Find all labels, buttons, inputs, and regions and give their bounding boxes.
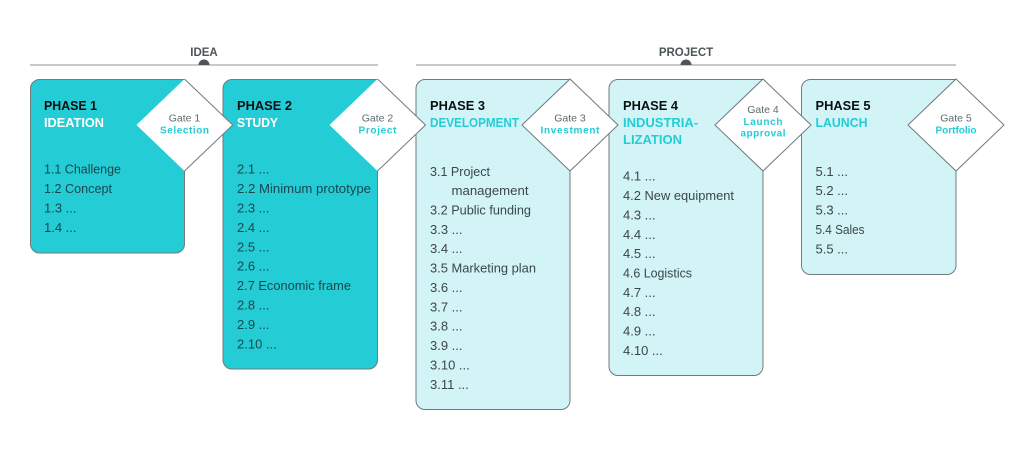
list: phase 1 items: 1.2 Concept <box>44 181 112 196</box>
gate 5 diamond: Gate 5 <box>940 112 972 124</box>
list: phase 3 items: 3.10 ... <box>430 358 470 372</box>
list: phase 5 items: 5.4 Sales <box>816 222 865 237</box>
list: phase 3 items: 3.8 ... <box>430 318 463 334</box>
panel: phase 2 <box>223 80 378 369</box>
gate 2 diamond: Gate 2 <box>362 112 393 124</box>
gate 4 diamond <box>715 79 811 171</box>
list: phase 4 items: 4.9 ... <box>623 324 656 338</box>
list: phase 3 items: 3.11 ... <box>430 377 469 392</box>
gate 4 diamond: Gate 4 <box>747 104 779 116</box>
gate 3 diamond: Gate 3 <box>554 112 586 124</box>
heading: phase 3: PHASE 3 <box>430 98 485 113</box>
list: phase 4 items: 4.1 ... <box>623 168 656 184</box>
subheading: ideation: IDEATION <box>44 115 104 130</box>
list: phase 5 items: 5.1 ... <box>816 164 848 179</box>
heading: phase 4: PHASE 4 <box>623 98 679 113</box>
gate 2 diamond <box>330 79 426 171</box>
list: phase 2 items: 2.9 ... <box>237 317 270 332</box>
list: phase 1 items: 1.1 Challenge <box>44 162 121 176</box>
list: phase 1 items <box>44 162 121 235</box>
list: phase 4 items: 4.6 Logistics <box>623 266 692 280</box>
gate 5 diamond <box>908 79 1004 171</box>
subheading: launch: LAUNCH <box>816 115 868 130</box>
list: phase 2 items: 2.2 Minimum prototype <box>237 181 371 196</box>
gate 2 diamond: Project <box>358 126 397 136</box>
list: phase 4 items: 4.10 ... <box>623 343 663 358</box>
list: phase 2 items: 2.1 ... <box>237 162 270 176</box>
heading: phase 1: PHASE 1 <box>44 98 97 113</box>
heading: phase 2: PHASE 2 <box>237 98 292 113</box>
list: phase 4 items: 4.3 ... <box>623 208 656 222</box>
header: idea: IDEA <box>190 47 218 59</box>
list: phase 3 items: 3.2 Public funding <box>430 202 531 218</box>
gate 4 diamond: approval <box>740 128 786 140</box>
list: phase 4 items: 4.5 ... <box>623 246 656 261</box>
list: phase 2 items: 2.6 ... <box>237 258 270 274</box>
gate 3 diamond: Investment <box>540 126 600 136</box>
list: phase 2 items: 2.4 ... <box>237 220 270 235</box>
subheading: industrialization: LIZATION <box>623 132 682 147</box>
panel: phase 1 <box>30 80 184 253</box>
gate 4 diamond: Launch <box>744 117 782 128</box>
header: project: PROJECT <box>659 47 713 59</box>
list: phase 2 items <box>237 162 371 352</box>
list: phase 3 items <box>430 164 536 392</box>
gate 1 diamond: Selection <box>160 126 209 136</box>
list: phase 4 items: 4.8 ... <box>623 304 656 319</box>
list: phase 5 items <box>816 164 865 256</box>
subheading: development: DEVELOPMENT <box>430 115 519 130</box>
list: phase 3 items: 3.9 ... <box>430 338 463 353</box>
list: phase 4 items <box>623 168 734 358</box>
list: phase 1 items: 1.3 ... <box>44 200 77 216</box>
list: phase 5 items: 5.5 ... <box>816 242 848 256</box>
list: phase 3 items: management <box>452 183 529 198</box>
list: phase 4 items: 4.2 New equipment <box>623 188 734 203</box>
subheading: study: STUDY <box>237 115 278 130</box>
heading: phase 5: PHASE 5 <box>816 98 870 113</box>
header: idea <box>30 47 378 65</box>
list: phase 3 items: 3.7 ... <box>430 300 463 314</box>
panel: phase 5 <box>802 80 956 274</box>
list: phase 2 items: 2.5 ... <box>237 240 270 254</box>
list: phase 3 items: 3.3 ... <box>430 222 463 237</box>
gate 1 diamond: Gate 1 <box>169 112 200 124</box>
list: phase 3 items: 3.6 ... <box>430 280 463 295</box>
list: phase 3 items: 3.4 ... <box>430 241 463 256</box>
header: project <box>416 47 956 65</box>
gate 3 diamond <box>522 79 618 171</box>
panel: phase 4 <box>609 80 763 376</box>
list: phase 2 items: 2.7 Economic frame <box>237 278 351 293</box>
list: phase 3 items: 3.5 Marketing plan <box>430 260 536 276</box>
list: phase 4 items: 4.7 ... <box>623 285 656 300</box>
list: phase 4 items: 4.4 ... <box>623 227 656 242</box>
list: phase 5 items: 5.2 ... <box>816 183 848 198</box>
list: phase 2 items: 2.8 ... <box>237 298 270 312</box>
panel: phase 3 <box>416 80 570 410</box>
list: phase 3 items: 3.1 Project <box>430 164 490 179</box>
gate 1 diamond <box>136 79 233 171</box>
list: phase 2 items: 2.3 ... <box>237 200 270 216</box>
subheading: industrialization: INDUSTRIA- <box>623 115 698 130</box>
list: phase 1 items: 1.4 ... <box>44 220 77 235</box>
list: phase 5 items: 5.3 ... <box>816 202 848 218</box>
list: phase 2 items: 2.10 ... <box>237 336 277 352</box>
gate 5 diamond: Portfolio <box>935 126 977 136</box>
